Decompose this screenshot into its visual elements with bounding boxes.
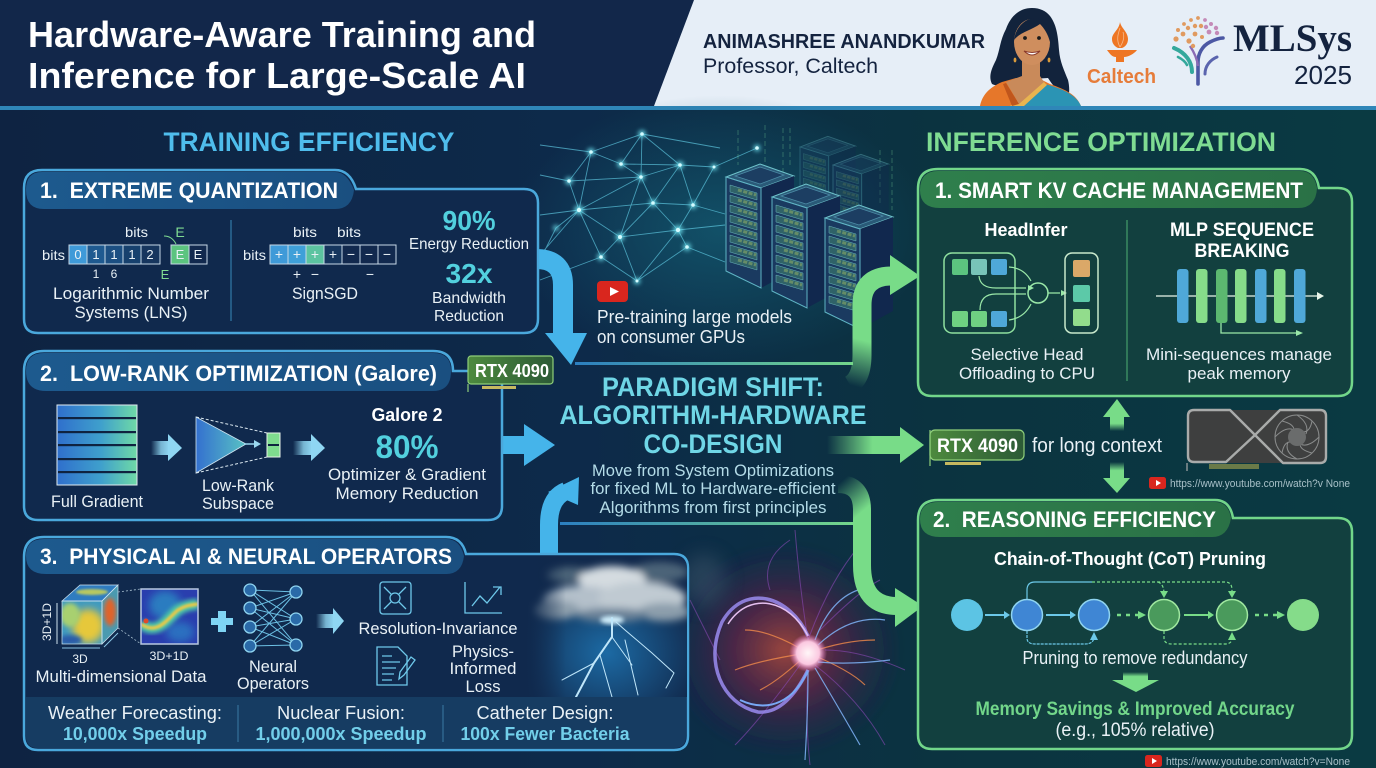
HeadInfer caption: Selective Head bbox=[970, 345, 1084, 364]
SignSGD diagram: − bbox=[365, 246, 373, 262]
multi-dimensional data graphic: 3D bbox=[72, 652, 88, 666]
LNS diagram: 1 bbox=[92, 247, 100, 262]
panel heading: 2. LOW-RANK OPTIMIZATION (Galore) bbox=[40, 361, 437, 386]
physics-informed loss label: Loss bbox=[466, 677, 500, 696]
neural network graphic bbox=[540, 130, 760, 284]
chip: RTX 4090: RTX 4090 bbox=[475, 361, 549, 381]
storm image bbox=[526, 556, 690, 698]
server racks bbox=[726, 136, 893, 329]
center bottom imagery: plasma bbox=[667, 530, 905, 765]
central description: for fixed ML to Hardware-efficient bbox=[590, 479, 836, 498]
GPU illustration bbox=[1187, 410, 1326, 471]
result: nuclear fusion bbox=[256, 703, 426, 744]
MLP caption: Mini-sequences manage bbox=[1146, 345, 1332, 364]
result: catheter design bbox=[460, 703, 630, 744]
arrow bbox=[293, 434, 325, 461]
MLP sequence breaking heading bbox=[1170, 220, 1314, 262]
stat: Galore 2: Memory Reduction bbox=[336, 484, 478, 503]
SignSGD label: SignSGD bbox=[292, 284, 358, 303]
source link: RTX: https://www.youtube.com/watch?v None bbox=[1170, 478, 1350, 490]
result text bbox=[976, 699, 1295, 741]
MLP caption: peak memory bbox=[1188, 364, 1291, 383]
stat: bandwidth reduction: Reduction bbox=[434, 308, 504, 325]
stat: Galore 2: 80% bbox=[376, 429, 438, 465]
result text: Memory Savings & Improved Accuracy bbox=[976, 699, 1295, 720]
central description: Algorithms from first principles bbox=[600, 498, 826, 517]
panel heading bbox=[26, 353, 451, 391]
panel: physical AI and neural operators bbox=[24, 537, 690, 750]
LNS diagram: 6 bbox=[111, 267, 118, 281]
source link: reasoning: https://www.youtube.com/watch?v=None bbox=[1166, 756, 1350, 768]
result: weather forecasting bbox=[48, 703, 222, 744]
arrow: result bbox=[1112, 672, 1159, 692]
neural operators network bbox=[237, 584, 309, 693]
Caltech logo bbox=[1087, 22, 1156, 88]
arrow: low-rank to center bbox=[502, 424, 555, 466]
arrow: quantization to center bbox=[536, 259, 587, 365]
panel: reasoning efficiency bbox=[918, 500, 1352, 749]
arrow: physical AI to center bbox=[548, 477, 579, 556]
result: catheter design: 100x Fewer Bacteria bbox=[460, 724, 630, 744]
full gradient block: Full Gradient bbox=[51, 492, 143, 511]
MLSys logo bbox=[1173, 16, 1352, 90]
LNS diagram: 0 bbox=[74, 247, 82, 262]
speaker name and role bbox=[703, 31, 986, 78]
SignSGD diagram: + bbox=[329, 246, 337, 262]
arrow: up to KV cache bbox=[1103, 399, 1130, 431]
plus sign bbox=[211, 611, 233, 632]
chip: RTX 4090 for long context bbox=[930, 430, 1162, 466]
SignSGD diagram: − bbox=[366, 266, 374, 282]
multi-dimensional data graphic bbox=[36, 584, 207, 686]
title: Inference for Large-Scale AI bbox=[28, 55, 526, 96]
callout: pre-training on consumer GPUs bbox=[597, 281, 792, 347]
multi-dimensional data graphic: Multi-dimensional Data bbox=[36, 667, 207, 686]
stat: energy reduction: 90% bbox=[442, 205, 496, 236]
panel heading: 1. SMART KV CACHE MANAGEMENT bbox=[935, 178, 1304, 203]
arrow: center to reasoning bbox=[838, 484, 923, 627]
MLP sequence diagram bbox=[1156, 269, 1324, 336]
pruning caption: Pruning to remove redundancy bbox=[1022, 648, 1248, 668]
panel heading: 1. EXTREME QUANTIZATION bbox=[40, 178, 338, 203]
LNS diagram: E bbox=[161, 267, 170, 282]
central description bbox=[590, 461, 836, 517]
SignSGD diagram: + bbox=[293, 246, 301, 262]
SignSGD diagram: + bbox=[275, 246, 283, 262]
LNS diagram: bits bbox=[42, 247, 65, 263]
stat: bandwidth reduction bbox=[432, 258, 506, 325]
multi-dimensional data graphic: 3D+1D bbox=[40, 603, 54, 641]
panel heading: 3. PHYSICAL AI & NEURAL OPERATORS bbox=[40, 544, 452, 569]
SignSGD diagram: + bbox=[311, 246, 319, 262]
panel: low-rank optimization bbox=[24, 351, 553, 520]
panel heading bbox=[920, 171, 1317, 208]
panel heading bbox=[26, 539, 464, 574]
LNS diagram: E bbox=[194, 247, 203, 262]
panel heading bbox=[920, 502, 1231, 537]
CoT heading: Chain-of-Thought (CoT) Pruning bbox=[994, 549, 1266, 569]
LNS diagram: bits bbox=[125, 224, 148, 240]
SignSGD diagram: + bbox=[293, 266, 301, 282]
central heading: paradigm shift: CO-DESIGN bbox=[644, 429, 782, 459]
stat: energy reduction: Energy Reduction bbox=[409, 236, 529, 253]
section heading: training efficiency: TRAINING EFFICIENCY bbox=[164, 127, 454, 157]
low-rank subspace: Low-Rank bbox=[202, 476, 274, 495]
LNS diagram: 1 bbox=[128, 247, 136, 262]
stat: bandwidth reduction: Bandwidth bbox=[432, 290, 506, 307]
LNS diagram bbox=[42, 224, 207, 282]
result text: (e.g., 105% relative) bbox=[1056, 720, 1214, 741]
MLP caption bbox=[1146, 345, 1332, 383]
stat: energy reduction bbox=[409, 205, 529, 253]
full gradient block bbox=[51, 405, 143, 511]
panel heading: 2. REASONING EFFICIENCY bbox=[933, 507, 1216, 532]
central heading: paradigm shift: ALGORITHM-HARDWARE bbox=[560, 400, 866, 430]
horizontal divider lines bbox=[560, 362, 853, 525]
multi-dimensional data graphic: 3D+1D bbox=[150, 649, 189, 663]
header band bbox=[0, 0, 1376, 110]
results strip bbox=[26, 697, 686, 748]
stat: Galore 2 bbox=[328, 405, 486, 503]
LNS label bbox=[53, 284, 209, 322]
SignSGD diagram: bits bbox=[243, 247, 266, 263]
speaker name and role: Professor, Caltech bbox=[703, 55, 878, 78]
low-rank subspace bbox=[196, 417, 280, 513]
arrow bbox=[151, 434, 182, 461]
result: nuclear fusion: Nuclear Fusion: bbox=[277, 703, 405, 723]
LNS label: Systems (LNS) bbox=[74, 303, 188, 322]
stat: Galore 2: Galore 2 bbox=[372, 405, 442, 425]
data streaks bbox=[738, 125, 892, 210]
low-rank subspace: Subspace bbox=[202, 494, 274, 513]
central description: Move from System Optimizations bbox=[592, 461, 834, 480]
center top imagery: neural network and servers bbox=[510, 95, 930, 365]
section heading: inference optimization: INFERENCE OPTIMIZATION bbox=[926, 127, 1276, 157]
panel: smart KV cache management bbox=[918, 169, 1352, 396]
MLSys logo: MLSys bbox=[1233, 17, 1352, 60]
SignSGD diagram: − bbox=[383, 246, 391, 262]
resolution-invariance label: Resolution-Invariance bbox=[358, 619, 518, 638]
title bbox=[28, 14, 536, 96]
panel: extreme quantization bbox=[24, 170, 538, 333]
callout: pre-training on consumer GPUs: on consumer GPUs bbox=[597, 327, 745, 347]
HeadInfer caption: Offloading to CPU bbox=[959, 364, 1095, 383]
central heading: paradigm shift: PARADIGM SHIFT: bbox=[602, 372, 824, 402]
MLSys logo: 2025 bbox=[1294, 60, 1352, 90]
LNS diagram: 1 bbox=[110, 247, 118, 262]
LNS diagram: 1 bbox=[93, 267, 100, 281]
result: catheter design: Catheter Design: bbox=[476, 703, 614, 723]
LNS label: Logarithmic Number bbox=[53, 284, 209, 303]
LNS diagram: E bbox=[176, 247, 185, 262]
HeadInfer heading: HeadInfer bbox=[984, 220, 1068, 240]
faint cloud beyond panel bbox=[682, 554, 726, 606]
SignSGD diagram: − bbox=[311, 266, 319, 282]
physics-informed loss label bbox=[450, 642, 516, 696]
speaker name and role: ANIMASHREE ANANDKUMAR bbox=[703, 31, 986, 53]
arrow bbox=[316, 608, 344, 634]
arrow: center to RTX 4090 bbox=[827, 427, 924, 463]
title: Hardware-Aware Training and bbox=[28, 14, 536, 55]
HeadInfer caption bbox=[959, 345, 1095, 383]
panel heading bbox=[26, 172, 354, 209]
result: nuclear fusion: 1,000,000x Speedup bbox=[256, 724, 426, 744]
chip: RTX 4090 for long context: for long context bbox=[1032, 435, 1162, 457]
physics-informed loss label: Physics- bbox=[452, 642, 514, 661]
result: weather forecasting: 10,000x Speedup bbox=[63, 724, 207, 744]
central heading: paradigm shift bbox=[560, 372, 866, 459]
icon: document and pen bbox=[377, 647, 415, 685]
HeadInfer diagram bbox=[944, 253, 1098, 333]
arrow: down to reasoning bbox=[1103, 462, 1130, 493]
neural operators network: Operators bbox=[237, 674, 309, 693]
portrait illustration bbox=[980, 8, 1081, 106]
SignSGD diagram: bits bbox=[337, 224, 361, 240]
icon: YouTube bbox=[597, 281, 628, 302]
callout: pre-training on consumer GPUs: Pre-training large models bbox=[597, 307, 792, 327]
neural operators network: Neural bbox=[249, 657, 297, 676]
icon: resolution invariance bbox=[380, 582, 411, 614]
stat: bandwidth reduction: 32x bbox=[446, 258, 493, 289]
arrow: center to KV cache bbox=[850, 255, 920, 385]
physics-informed loss label: Informed bbox=[450, 659, 516, 678]
LNS diagram: 2 bbox=[146, 247, 154, 262]
MLP sequence breaking heading: MLP SEQUENCE bbox=[1170, 220, 1314, 241]
SignSGD diagram bbox=[243, 224, 396, 282]
result: weather forecasting: Weather Forecasting: bbox=[48, 703, 222, 723]
Caltech logo: Caltech bbox=[1087, 66, 1156, 88]
CoT chain diagram bbox=[951, 582, 1319, 644]
SignSGD diagram: − bbox=[347, 246, 355, 262]
chip: RTX 4090 bbox=[468, 356, 553, 392]
MLP sequence breaking heading: BREAKING bbox=[1194, 241, 1290, 262]
stat: Galore 2: Optimizer & Gradient bbox=[328, 465, 486, 484]
LNS diagram: E bbox=[175, 224, 185, 240]
chip: RTX 4090 for long context: RTX 4090 bbox=[937, 436, 1018, 457]
SignSGD diagram: bits bbox=[293, 224, 317, 240]
icon: line chart bbox=[465, 582, 502, 613]
